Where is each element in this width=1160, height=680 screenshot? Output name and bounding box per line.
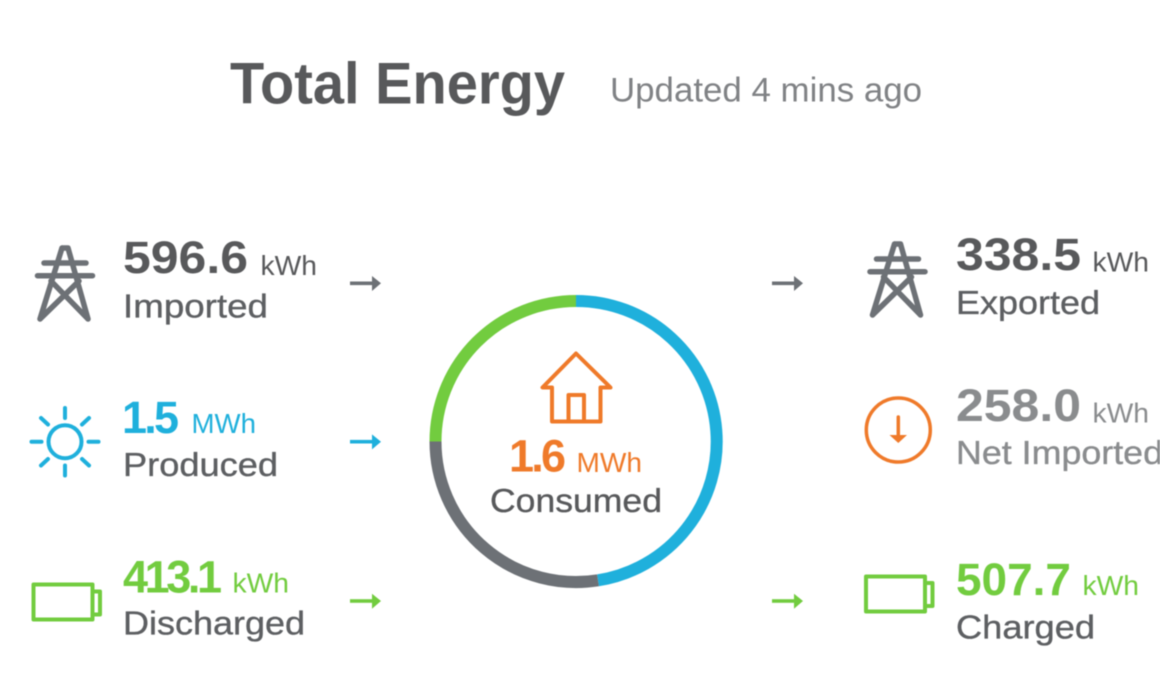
icon: net import circle (866, 398, 930, 462)
icon: battery charged (866, 576, 932, 612)
arrow: charged (772, 594, 803, 609)
panel: net imported (866, 380, 1160, 471)
updated timestamp: Updated 4 mins ago (610, 72, 922, 110)
charged label: Charged (956, 608, 1095, 646)
consumed label: Consumed (490, 482, 662, 519)
produced label: Produced (123, 446, 278, 483)
panel: charged (772, 554, 1139, 646)
imported value: 596.6 (123, 232, 248, 283)
exported value: 338.5 (956, 229, 1081, 280)
exported label: Exported (956, 284, 1100, 321)
icon: sun (32, 408, 98, 476)
panel: discharged (34, 552, 381, 642)
icon: exported pylon (870, 244, 925, 315)
arrow: imported (350, 276, 381, 291)
panel: produced (32, 392, 381, 483)
icon: house (542, 354, 610, 422)
net imported unit: kWh (1092, 398, 1149, 428)
arrow: exported (772, 276, 803, 291)
panel: exported (772, 229, 1149, 321)
discharged value: 413.1 (123, 552, 222, 602)
net imported value: 258.0 (956, 380, 1081, 431)
panel: consumed ring (436, 301, 717, 582)
discharged label: Discharged (123, 604, 305, 642)
consumed value: 1.6 (509, 430, 566, 482)
discharged unit: kWh (232, 568, 289, 598)
donut chart (436, 301, 717, 582)
imported unit: kWh (260, 250, 317, 281)
arrow: produced (350, 434, 381, 449)
consumed unit: MWh (576, 447, 642, 478)
icon: battery discharged (34, 584, 100, 620)
produced value: 1.5 (122, 392, 179, 443)
arrow: discharged (350, 594, 381, 609)
imported label: Imported (123, 288, 268, 324)
net imported label: Net Imported (956, 434, 1160, 471)
charged value: 507.7 (956, 554, 1071, 605)
charged unit: kWh (1082, 570, 1139, 601)
icon: imported pylon (38, 248, 92, 319)
exported unit: kWh (1092, 247, 1149, 278)
produced unit: MWh (192, 408, 256, 439)
panel: imported (38, 232, 381, 324)
title: Total Energy (230, 52, 565, 116)
